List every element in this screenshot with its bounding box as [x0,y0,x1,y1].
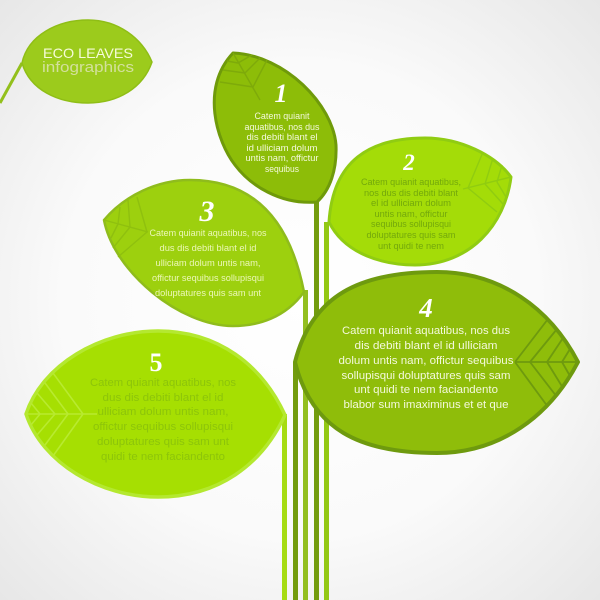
leaf 3 text: doluptatures quis sam unt [155,288,261,299]
plant stems [282,200,329,600]
leaf 5 text: ulliciam dolum untis nam, [98,406,228,418]
leaf 5 shape [26,331,285,497]
leaf 4 text: unt quidi te nem faciandento [354,384,498,396]
leaf 2 text: nos dus dis debiti blant [364,188,458,199]
leaf 5 text: dus dis debiti blant el id [102,392,224,404]
leaf 2 shape [329,138,511,265]
leaf 5 text [90,377,237,463]
leaf 5 veins [26,373,97,456]
leaf 3 shape [104,180,304,326]
leaf 1 text [244,111,320,175]
leaf 5 text: doluptatures quis sam unt [97,436,229,448]
leaf 5 text: Catem quianit aquatibus, nos [90,377,237,389]
leaf 2 number: 2 [402,150,415,175]
leaf 3 text: ulliciam dolum untis nam, [156,258,260,269]
leaf 4 text: blabor sum imaximinus et et que [344,399,508,411]
leaf 4 number: 4 [418,293,433,323]
header leaf [0,20,152,103]
header leaf shape [22,20,152,103]
leaf 1 number: 1 [274,79,288,108]
header stem [0,63,22,103]
leaf 4 text [338,325,514,411]
leaf 3 number: 3 [198,195,214,228]
leaf 2 text: unt quidi te nem [378,241,444,252]
leaf 5 [26,331,285,497]
leaf 5 text: offictur sequibus sollupisqui [93,421,233,433]
leaf 1 text: Catem quianit [254,111,310,122]
leaf 2 text: el id ulliciam dolum [371,198,451,209]
leaf 2 text: doluptatures quis sam [366,230,456,241]
leaf 1 text: sequibus [265,164,299,175]
leaf 4 text: Catem quianit aquatibus, nos dus [342,325,511,337]
leaf 1 veins [220,53,267,100]
leaf 1 text: aquatibus, nos dus [244,122,320,133]
leaf 3 text: offictur sequibus sollupisqui [152,273,264,284]
leaf 4 veins [515,319,578,407]
leaf 3 veins [104,197,148,257]
leaf 1 shape [214,53,336,202]
leaf 1 text: untis nam, offictur [246,153,318,164]
leaf 3 text [150,228,267,299]
leaf 4 text: sollupisqui doluptatures quis sam [342,370,510,382]
leaf 2 text: sequibus sollupisqui [371,219,451,230]
leaf 3 text: Catem quianit aquatibus, nos [150,228,267,239]
leaf 2 text [361,177,461,252]
leaf 5 text: quidi te nem faciandento [101,451,225,463]
leaf 5 number: 5 [150,348,162,377]
leaf 4 shape [295,272,578,453]
leaf 3 [104,180,304,326]
leaf 4 text: dolum untis nam, offictur sequibus [338,355,514,367]
header subtitle: infographics [42,59,134,76]
leaf 1 text: id ulliciam dolum [246,143,318,154]
leaf 1 text: dis debiti blant el [246,132,318,143]
leaf 3 text: dus dis debiti blant el id [160,243,256,254]
leaf 4 [295,272,578,453]
leaf 2 veins [463,152,511,212]
leaf 1 [214,53,336,202]
leaf 2 text: Catem quianit aquatibus, [361,177,461,188]
leaf 2 [329,138,511,265]
leaf 4 text: dis debiti blant el id ulliciam [354,340,498,352]
header title: ECO LEAVES [43,45,133,61]
leaf 2 text: untis nam, offictur [374,209,448,220]
